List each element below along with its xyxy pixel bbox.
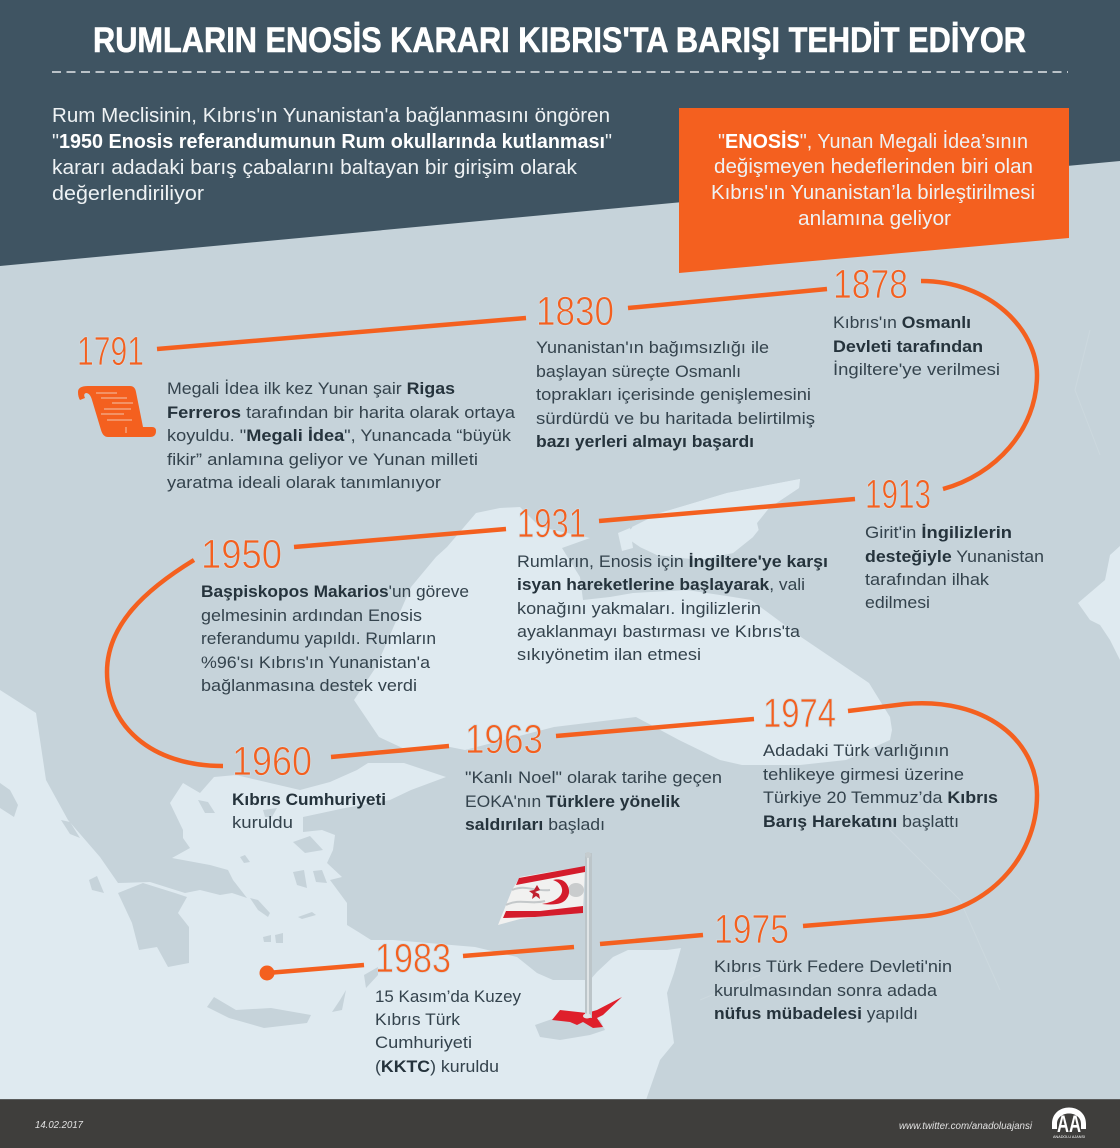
description 1975: kurulmasından sonra adada (714, 981, 938, 1000)
icon: KKTC flag on pole (498, 852, 592, 1018)
description 1974: tehlikeye girmesi üzerine (763, 765, 964, 784)
description 1931 (517, 552, 828, 664)
description 1791 (167, 379, 516, 492)
event 1983 (375, 935, 521, 1076)
intro text: kararı adadaki barış çabalarını baltayan bir girişim olarak (52, 157, 578, 179)
date: 14.02.2017 (35, 1120, 83, 1131)
description 1963: saldırıları başladı (465, 815, 605, 834)
description 1950: referandumu yapıldı. Rumların (201, 629, 436, 648)
event 1960 (232, 738, 386, 832)
description 1830: bazı yerleri almayı başardı (536, 432, 754, 451)
description 1791: fikir” anlamına geliyor ve Yunan milleti (167, 450, 478, 469)
logo: Anadolu Agency (1052, 1108, 1086, 1139)
description 1983 (375, 987, 521, 1076)
icon: scroll (78, 386, 156, 437)
description 1974: Türkiye 20 Temmuz’da Kıbrıs (763, 788, 998, 807)
description 1950: Başpiskopos Makarios'un göreve (201, 582, 469, 601)
description 1791: yaratma ideali olarak tanımlanıyor (167, 473, 441, 492)
event 1950 (201, 531, 469, 695)
logo: Anadolu Agency: AA (1057, 1111, 1081, 1138)
year 1975: 1975 (714, 906, 789, 952)
year 1830: 1830 (536, 288, 614, 334)
callout: Enosis definition: anlamına geliyor (798, 208, 951, 230)
description 1983: Cumhuriyeti (375, 1033, 472, 1052)
description 1931: Rumların, Enosis için İngiltere'ye karşı (517, 552, 828, 571)
description 1975: Kıbrıs Türk Federe Devleti'nin (714, 957, 952, 976)
description 1913 (865, 523, 1044, 612)
timeline connector path (107, 281, 1037, 973)
description 1878 (833, 313, 1000, 379)
intro text: Rum Meclisinin, Kıbrıs'ın Yunanistan'a bağlanmasını öngören (52, 105, 610, 127)
description 1950: gelmesinin ardından Enosis (201, 606, 422, 625)
description 1931: isyan hareketlerine başlayarak , vali (517, 575, 805, 594)
year 1931: 1931 (517, 500, 586, 546)
description 1931: sıkıyönetim ilan etmesi (517, 645, 701, 664)
description 1974: Adadaki Türk varlığının (763, 741, 949, 760)
description 1963: "Kanlı Noel" olarak tarihe geçen (465, 768, 722, 787)
event 1974 (763, 690, 998, 831)
description 1960 (232, 790, 386, 832)
description 1791: Ferreros tarafından bir harita olarak ortaya (167, 403, 516, 422)
twitter url: www.twitter.com/anadoluajansi (899, 1121, 1033, 1132)
callout: Enosis definition: Kıbrıs'ın Yunanistan’la birleştirilmesi (711, 182, 1035, 204)
description 1983: 15 Kasım’da Kuzey (375, 987, 521, 1006)
description 1974: Barış Harekatını başlattı (763, 812, 959, 831)
header band (0, 0, 1120, 266)
description 1830 (536, 338, 815, 451)
logo: Anadolu Agency: ANADOLU AJANSI (1053, 1134, 1085, 1139)
description 1975 (714, 957, 952, 1023)
description 1830: sürdürdü ve bu haritada belirtilmiş (536, 409, 815, 428)
event 1791 (77, 328, 516, 492)
year 1983: 1983 (375, 935, 451, 981)
description 1950 (201, 582, 469, 695)
description 1913: edilmesi (865, 593, 930, 612)
callout: Enosis definition: "ENOSİS", Yunan Megali İdea’sının (718, 130, 1028, 153)
description 1975: nüfus mübadelesi yapıldı (714, 1004, 918, 1023)
footer bar (0, 1099, 1120, 1148)
description 1878: Devleti tarafından (833, 337, 983, 356)
description 1974 (763, 741, 998, 831)
year 1878: 1878 (833, 261, 908, 307)
year 1913: 1913 (865, 471, 931, 517)
year 1791: 1791 (77, 328, 144, 374)
intro text (52, 105, 612, 205)
description 1878: İngiltere'ye verilmesi (833, 360, 1000, 379)
year 1950: 1950 (201, 531, 282, 577)
description 1963: EOKA'nın Türklere yönelik (465, 792, 681, 811)
description 1791: koyuldu. " Megali İdea ", Yunancada “büyük (167, 426, 512, 445)
event 1931 (517, 500, 828, 664)
description 1950: %96'sı Kıbrıs'ın Yunanistan'a (201, 653, 431, 672)
year 1963: 1963 (465, 716, 543, 762)
description 1931: ayaklanmayı bastırması ve Kıbrıs'ta (517, 622, 801, 641)
description 1931: konağını yakmaları. İngilizlerin (517, 599, 761, 618)
description 1983: Kıbrıs Türk (375, 1010, 461, 1029)
description 1913: Girit'in İngilizlerin (865, 523, 1012, 542)
description 1950: bağlanmasına destek verdi (201, 676, 417, 695)
description 1913: tarafından ilhak (865, 570, 990, 589)
description 1830: toprakları içerisinde genişlemesini (536, 385, 811, 404)
description 1830: Yunanistan'ın bağımsızlığı ile (536, 338, 769, 357)
intro text: "1950 Enosis referandumunun Rum okullarında kutlanması" (52, 131, 612, 153)
description 1960: Kıbrıs Cumhuriyeti (232, 790, 386, 809)
event 1913 (865, 471, 1044, 612)
description 1878: Kıbrıs'ın Osmanlı (833, 313, 971, 332)
description 1963 (465, 768, 722, 834)
description 1983: (KKTC) kuruldu (375, 1057, 499, 1076)
event 1975 (714, 906, 952, 1023)
description 1960: kuruldu (232, 813, 293, 832)
year 1960: 1960 (232, 738, 312, 784)
callout: Enosis definition (679, 108, 1069, 273)
callout: Enosis definition: değişmeyen hedeflerinden biri olan (714, 156, 1033, 178)
year 1974: 1974 (763, 690, 836, 736)
icon: Northern Cyprus map in red (552, 997, 622, 1028)
event 1963 (465, 716, 722, 834)
event 1878 (833, 261, 1000, 379)
event 1830 (536, 288, 815, 451)
description 1830: başlayan süreçte Osmanlı (536, 362, 741, 381)
description 1913: desteğiyle Yunanistan (865, 547, 1044, 566)
timeline end dot (260, 966, 274, 980)
intro text: değerlendiriliyor (52, 183, 204, 205)
description 1791: Megali İdea ilk kez Yunan şair Rigas (167, 379, 455, 398)
